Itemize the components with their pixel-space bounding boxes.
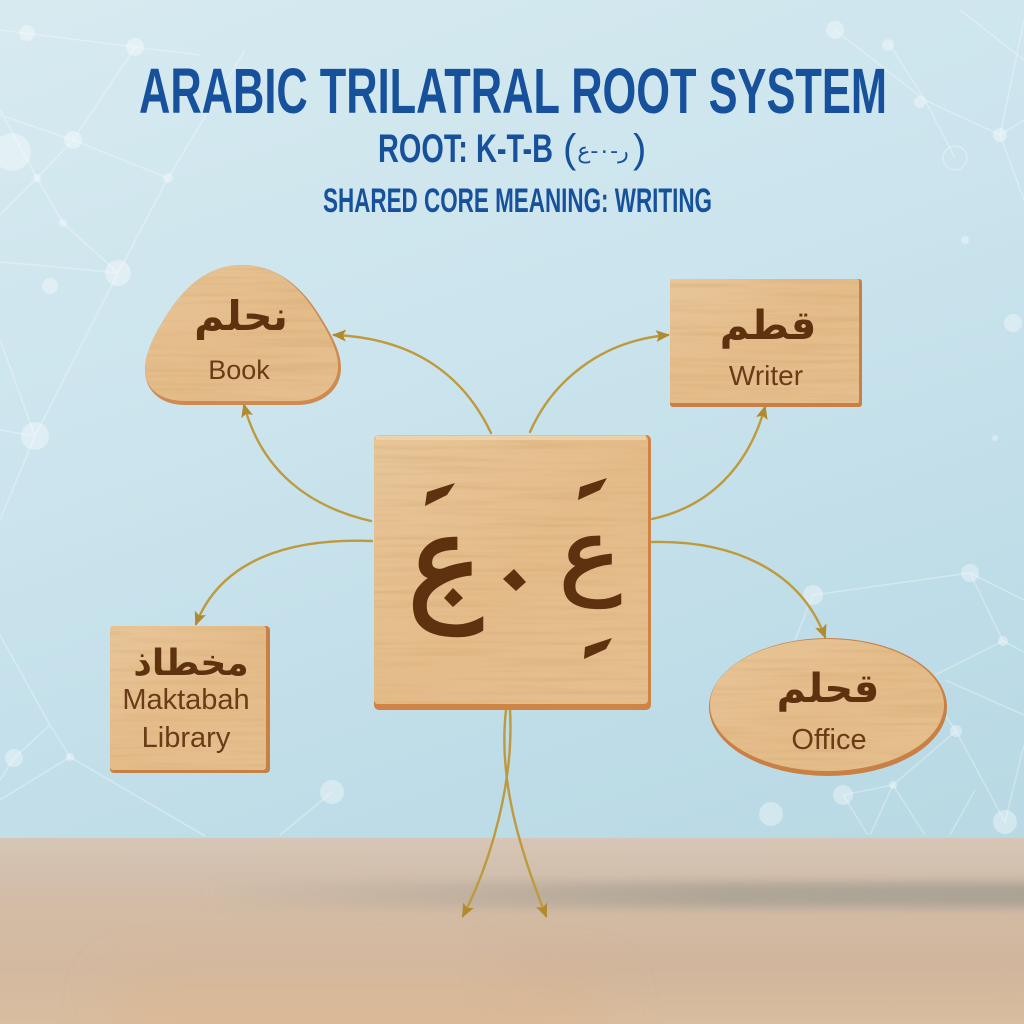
root letter left: ع [407,487,483,636]
subtitle: root: ) [633,127,646,171]
office arabic word: قحلم [777,666,879,712]
library arabic word: مخطاذ [133,643,249,684]
panel: library [110,626,270,773]
subtitle: root: ROOT: K-T-B [378,127,553,171]
panel: central root block [374,435,651,710]
library label: Maktabah: Maktabah [122,684,250,716]
panel: writer [670,279,862,407]
library label: Library: Library [142,722,231,754]
root letter middle dot [503,569,526,591]
arrows: connectors [196,335,825,916]
book label: Book [208,355,270,385]
subtitle: root: ( [563,127,577,171]
panel: office [709,638,947,776]
office label: Office [791,724,867,756]
root letter right: ع [559,499,621,608]
table surface [0,838,1024,1024]
root letter right [559,478,621,659]
panel: book [145,265,341,405]
subtitle: shared core meaning: SHARED CORE MEANING: WRITING [323,182,712,220]
writer label: Writer [729,360,803,391]
writer arabic word: قطم [720,303,816,349]
book arabic word: نحلم [194,292,288,340]
subtitle: root: ر-٠-ع [577,139,629,164]
